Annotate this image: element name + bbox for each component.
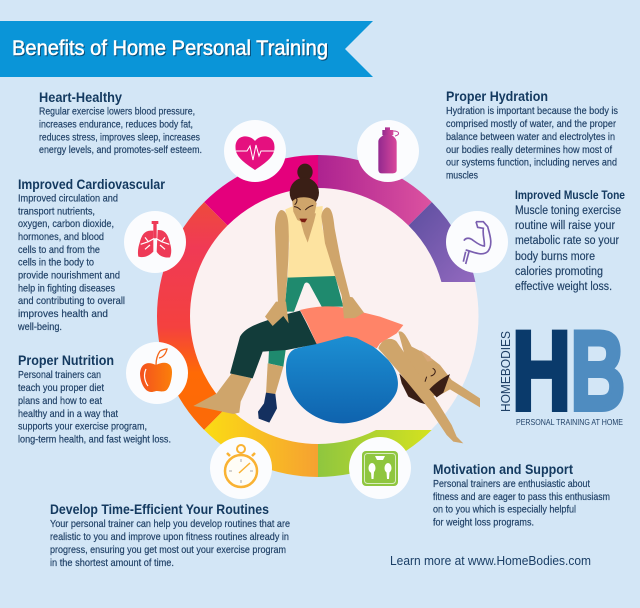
text block: Improved Muscle Tone: metabolic rate so your [515, 235, 619, 247]
text block: Proper Nutrition: healthy and in a way that [18, 408, 118, 420]
title banner: Benefits of Home Personal Training [13, 38, 329, 61]
text block: Motivation and Support [433, 461, 610, 528]
illustration: trainer and client on exercise ball [193, 164, 480, 443]
text block: Proper Hydration: our systems function, including nerves and [446, 156, 617, 168]
text block: Improved Cardiovascular: and contributing to overall [18, 295, 125, 307]
icon: water bottle [357, 120, 419, 182]
text block: Improved Muscle Tone: body burns more [515, 251, 595, 263]
text block: Improved Muscle Tone: Muscle toning exercise [515, 205, 621, 217]
text block: Proper Hydration [446, 88, 618, 182]
icon: heart [224, 120, 286, 182]
text block: Proper Hydration: balance between water and electrolytes in [446, 131, 615, 143]
icon: apple [126, 342, 188, 404]
text block: Improved Cardiovascular: Improved circulation and [18, 192, 118, 204]
text block: Develop Time-Efficient Your Routines [50, 501, 290, 569]
icon: flexed muscle arm [446, 211, 508, 273]
icon: stopwatch [210, 437, 272, 499]
text block: Proper Hydration: our bodies really determines how most of [446, 144, 612, 156]
client legs and torso [193, 306, 403, 414]
text block: Motivation and Support: Personal trainers are enthusiastic about [433, 478, 590, 490]
text block: Improved Cardiovascular: provide nourishment and [18, 270, 120, 282]
text block: Proper Hydration: comprised mostly of water, and the proper [446, 118, 616, 130]
text block: Improved Cardiovascular: hormones, and blood [18, 231, 104, 243]
text block: Improved Cardiovascular: oxygen, carbon dioxide, [18, 218, 114, 230]
text block: Heart-Healthy: Regular exercise lowers blood pressure, [39, 106, 195, 118]
text block: Improved Muscle Tone [515, 188, 625, 293]
text block: Improved Cardiovascular [17, 176, 165, 333]
text block: Improved Muscle Tone: effective weight loss. [515, 281, 612, 293]
logo: HomeBodies HB: H [512, 308, 571, 434]
call to action: Learn more at www.HomeBodies.com [390, 553, 591, 568]
text block: Improved Cardiovascular: transport nutrients, [18, 206, 95, 218]
text block: Heart-Healthy: Heart-Healthy [39, 89, 122, 105]
text block: Proper Nutrition: plans and how to eat [18, 395, 102, 407]
text block: Proper Nutrition: supports your exercise program, [18, 420, 147, 432]
text block: Develop Time-Efficient Your Routines: Develop Time-Efficient Your Routines [50, 501, 269, 517]
logo: HomeBodies HB [499, 308, 625, 434]
text block: Proper Nutrition: long-term health, and fast weight loss. [18, 434, 171, 446]
icon: lungs [124, 211, 186, 273]
text block: Motivation and Support: on to you which is especially helpful [433, 504, 576, 516]
text block: Motivation and Support: Motivation and Support [433, 461, 573, 477]
text block: Develop Time-Efficient Your Routines: progress, ensuring you get most out your exercise program [50, 544, 286, 556]
text block: Improved Cardiovascular: cells in the body to [18, 256, 94, 268]
text block: Improved Muscle Tone: routine will raise your [515, 220, 615, 232]
text block: Improved Cardiovascular: improves health and [18, 308, 108, 320]
text block: Improved Cardiovascular: Improved Cardiovascular [18, 176, 165, 192]
text block: Motivation and Support: fitness and are eager to pass this enthusiasm [433, 491, 610, 503]
text block: Develop Time-Efficient Your Routines: in the shortest amount of time. [50, 557, 174, 569]
client arms and head [378, 331, 480, 443]
text block: Heart-Healthy [39, 89, 202, 156]
text block: Heart-Healthy: reduces stress, improves sleep, increases [39, 132, 200, 144]
text block: Proper Nutrition: Proper Nutrition [18, 352, 114, 368]
text block: Improved Muscle Tone: calories promoting [515, 266, 603, 278]
title banner: Benefits of Home Personal Training [12, 37, 328, 60]
text block: Heart-Healthy: energy levels, and promotes-self esteem. [39, 144, 202, 156]
text block: Proper Nutrition: teach you proper diet [18, 382, 104, 394]
logo: HomeBodies HB: HOMEBODIES [499, 331, 513, 412]
text block: Proper Hydration: muscles [446, 170, 478, 182]
text block: Proper Nutrition: Personal trainers can [18, 369, 101, 381]
text block: Improved Cardiovascular: cells to and from the [18, 244, 100, 256]
trainer far lower leg and shoe [258, 350, 286, 423]
text block: Proper Hydration: Proper Hydration [446, 88, 548, 104]
text block: Proper Nutrition [18, 352, 171, 446]
trainer hands [265, 295, 364, 326]
title banner [0, 21, 373, 77]
text block: Develop Time-Efficient Your Routines: Your personal trainer can help you develop routines that are [50, 518, 290, 530]
trainer figure [275, 164, 350, 312]
exercise ball [286, 336, 398, 423]
circular ring diagram [157, 155, 478, 477]
text block: Improved Cardiovascular: help in fighting diseases [18, 282, 115, 294]
icon: weighing scale [349, 437, 411, 499]
text block: Proper Hydration: Hydration is important because the body is [446, 105, 618, 117]
text block: Improved Cardiovascular: well-being. [17, 321, 62, 333]
text block: Develop Time-Efficient Your Routines: realistic to you and improve upon fitness routines already in [50, 531, 289, 543]
text block: Heart-Healthy: increases endurance, reduces body fat, [39, 118, 193, 130]
text block: Motivation and Support: for weight loss programs. [433, 516, 534, 528]
